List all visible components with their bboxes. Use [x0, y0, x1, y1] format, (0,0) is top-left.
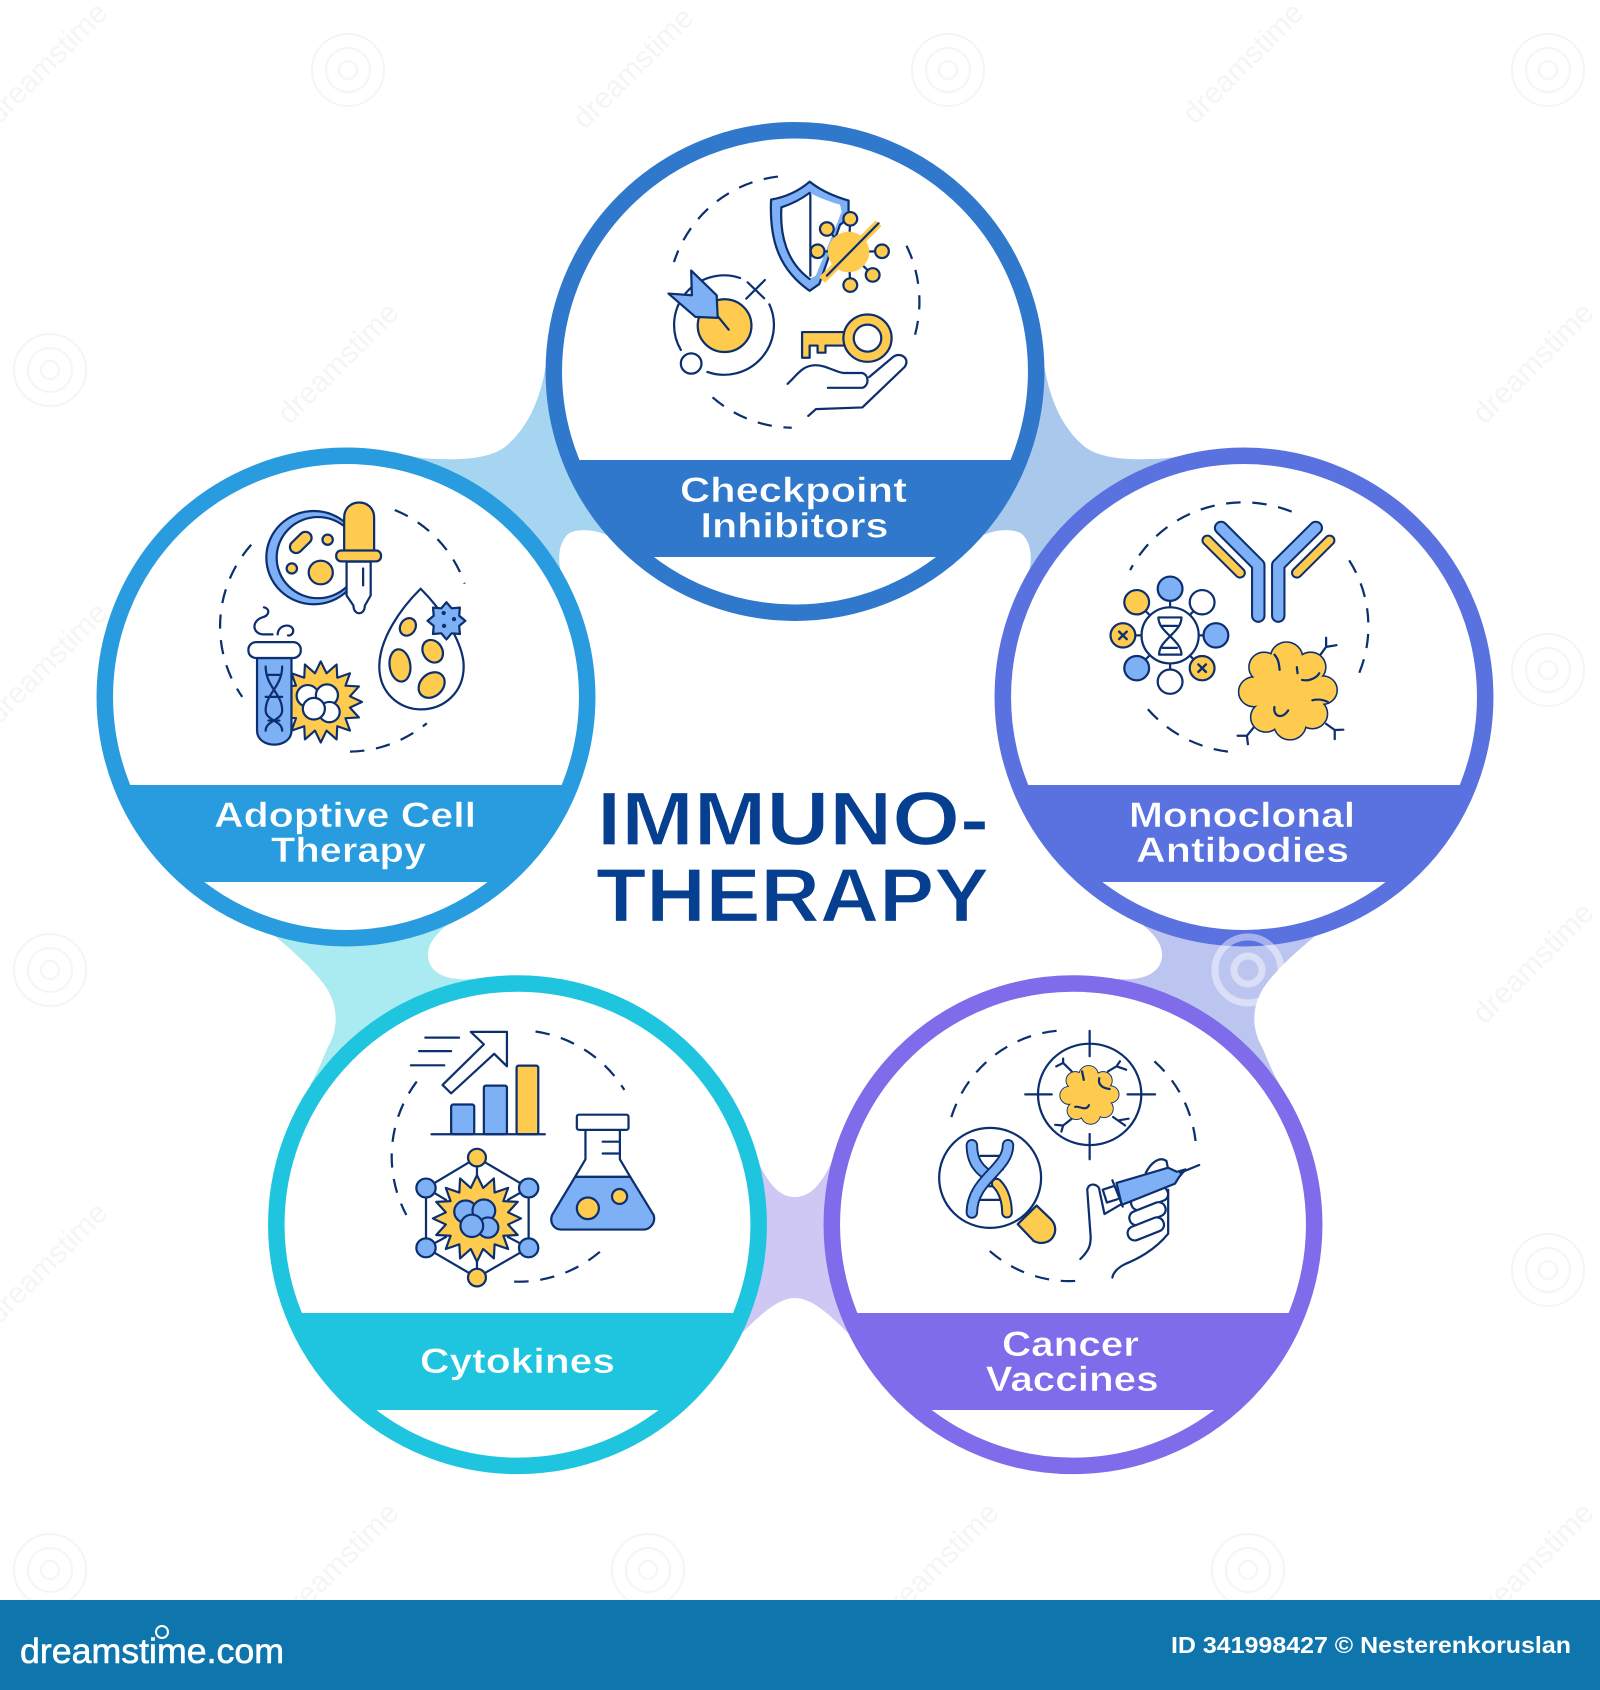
watermark text: dreamstime	[871, 1496, 1005, 1630]
label band	[858, 1313, 1288, 1410]
icon: shield, target, key	[668, 177, 919, 428]
label	[680, 471, 907, 546]
footer credit: ID 341998427 © Nesterenkoruslan	[1171, 1632, 1571, 1658]
panel: checkpoint inhibitors	[540, 130, 1050, 613]
footer logo: dreamstime.com	[20, 1632, 284, 1671]
connector: checkpoint to monoclonal	[950, 365, 1180, 600]
watermark text: dreamstime	[271, 296, 405, 430]
watermark text: dreamstime	[1466, 296, 1600, 430]
label	[1129, 796, 1355, 870]
icon: antibody, dna hub, tumor	[1111, 502, 1368, 752]
label band	[302, 1313, 733, 1410]
icon: petri dish, dropper, tube, cell	[220, 503, 465, 752]
label: Antibodies	[1136, 831, 1349, 870]
title: THERAPY	[596, 854, 989, 939]
label: Inhibitors	[700, 507, 888, 546]
watermark text: dreamstime	[1176, 0, 1310, 130]
label: Checkpoint	[680, 471, 907, 510]
panel: adoptive cell therapy	[90, 456, 600, 938]
watermark text: dreamstime	[1466, 896, 1600, 1030]
icon: targeted tumor, dna magnifier, syringe	[939, 1031, 1199, 1281]
footer bar	[0, 1600, 1600, 1690]
label: Therapy	[271, 831, 427, 870]
label: Monoclonal	[1129, 796, 1355, 835]
watermark text: dreamstime	[1466, 1496, 1600, 1630]
label: Adoptive Cell	[214, 796, 476, 835]
label	[214, 796, 476, 870]
connector: adoptive cell to cytokines	[262, 850, 480, 1085]
panel: cancer vaccines	[820, 983, 1330, 1466]
title	[596, 777, 989, 939]
connector: monoclonal to cancer vaccines	[1110, 850, 1328, 1085]
watermark text: dreamstime	[271, 1496, 405, 1630]
connector: cytokines to cancer vaccines	[740, 1155, 850, 1335]
title: IMMUNO-	[597, 777, 989, 862]
label	[986, 1325, 1159, 1399]
panel: monoclonal antibodies	[990, 456, 1500, 938]
watermark spiral over connector	[1215, 937, 1281, 1003]
label: Cancer	[1002, 1325, 1139, 1364]
connector: checkpoint to adoptive cell	[410, 365, 640, 600]
watermark text: dreamstime	[566, 1, 700, 135]
label band	[1028, 785, 1460, 882]
label: Vaccines	[986, 1360, 1159, 1399]
panel: cytokines	[260, 983, 770, 1466]
label band	[580, 460, 1010, 557]
label band	[130, 785, 562, 882]
label: Cytokines	[420, 1342, 615, 1381]
icon: growth chart, molecule, flask	[392, 1032, 654, 1286]
